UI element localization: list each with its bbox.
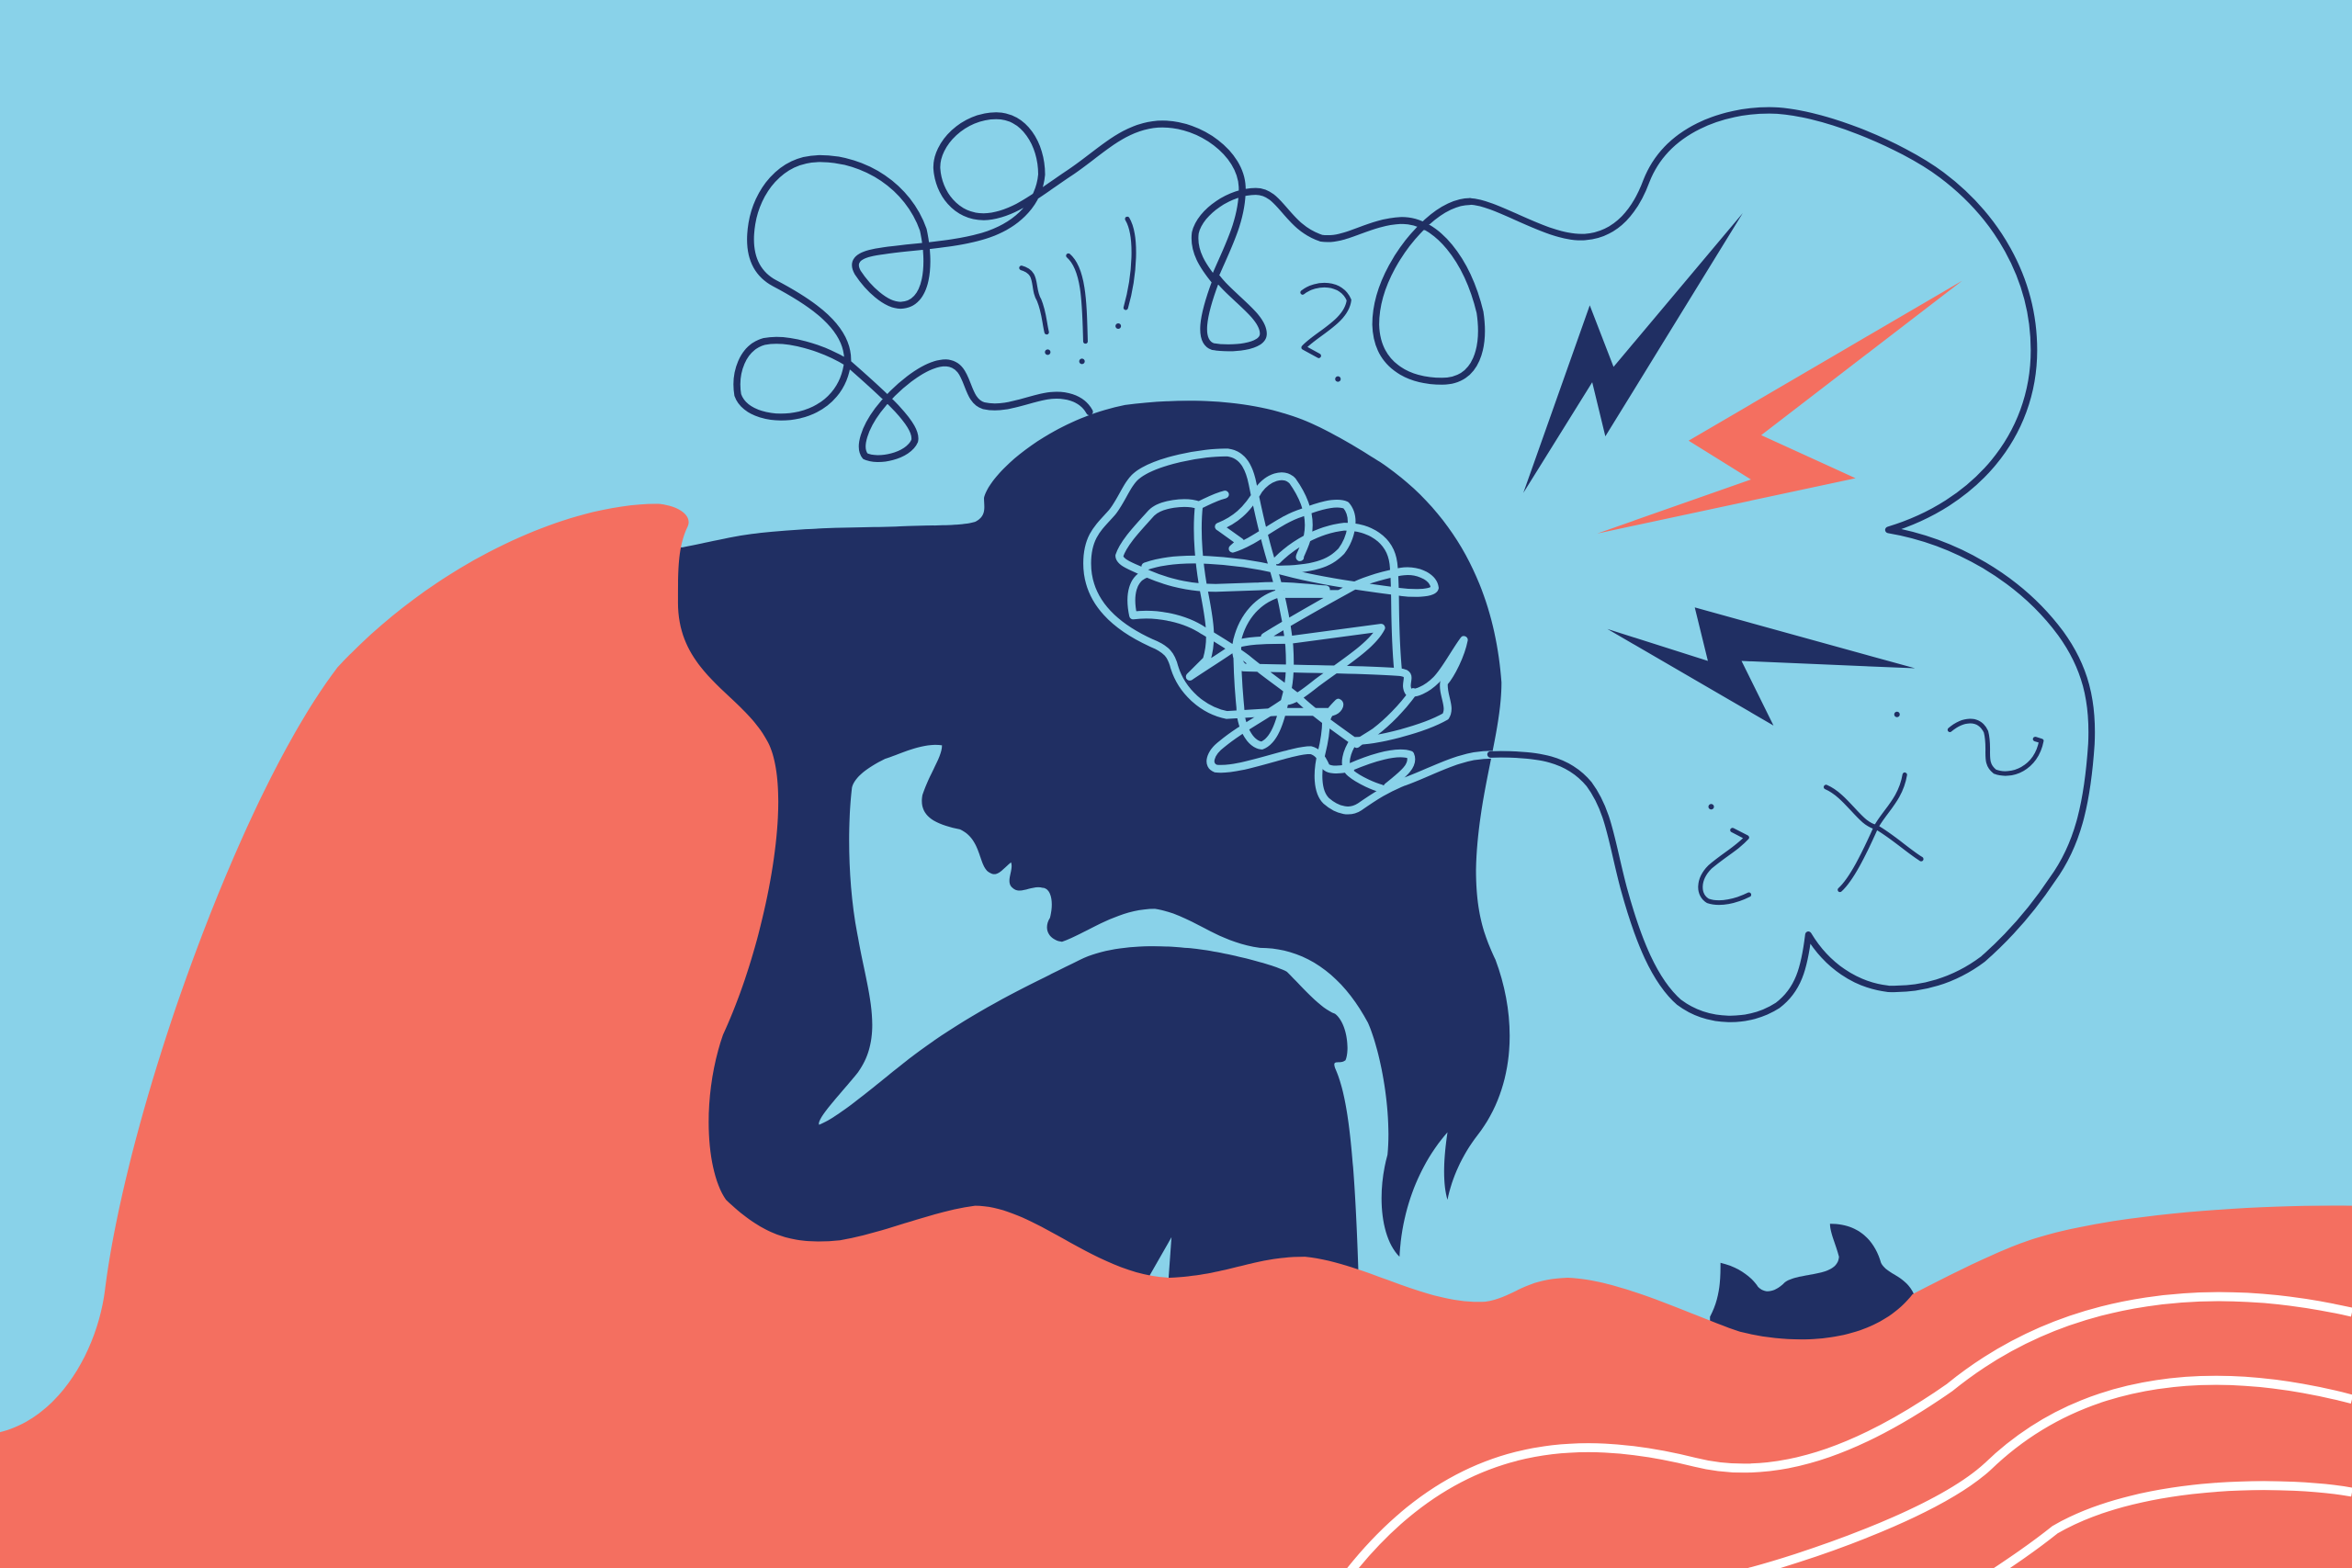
white wave lines (1350, 1297, 2352, 1568)
small gap in the body (1148, 1237, 1171, 1280)
lightning bolt: navy lower (1608, 607, 1915, 726)
scribbled punctuation marks (1022, 219, 1349, 379)
cloud outline (1470, 110, 2092, 1019)
scribbled symbols in the cloud (1701, 715, 2041, 903)
thought cloud with lightning bolts (1470, 110, 2092, 1019)
lightning bolt: navy upper (1523, 213, 1743, 493)
coral wave blanket (0, 504, 2352, 1568)
figure: head, hair and body silhouette (0, 400, 2352, 1568)
tangled scribble in the brain (1087, 453, 1491, 810)
lightning bolt: coral (1597, 281, 1962, 534)
looping scribble above the head (737, 116, 1481, 458)
shoulder shape at right (1710, 1224, 1914, 1349)
